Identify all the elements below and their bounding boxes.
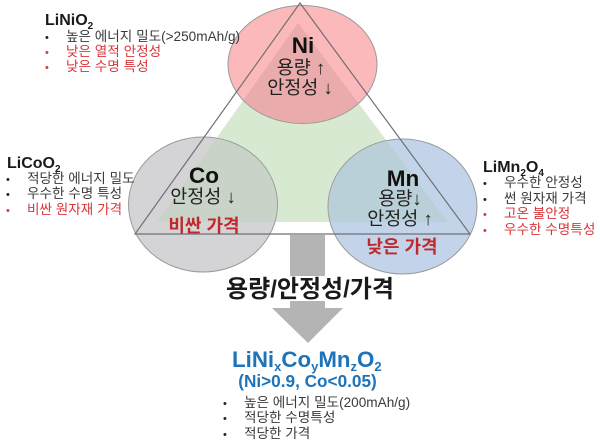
result properties: 적당한 가격 xyxy=(244,426,310,441)
LiNiO2 block: 낮은 수명 특성 xyxy=(66,59,149,74)
LiMn2O4 block: 고온 불안정 xyxy=(504,206,570,221)
result formula: Mn xyxy=(318,347,351,372)
result formula: O xyxy=(357,347,374,372)
LiNiO2 block: • xyxy=(45,32,49,44)
LiNiO2 block: LiNiO xyxy=(45,12,88,29)
Co labels: 비싼 가격 xyxy=(168,216,240,236)
Co labels: Co xyxy=(189,163,219,188)
result formula: z xyxy=(351,359,358,374)
green triangle xyxy=(157,23,448,222)
Ni labels: 안정성 ↓ xyxy=(267,77,333,98)
LiMn2O4 block: O xyxy=(526,159,538,176)
result formula: 2 xyxy=(374,359,382,374)
LiCoO2 block: • xyxy=(6,174,10,186)
result formula: x xyxy=(274,359,282,374)
Ni labels xyxy=(267,33,333,98)
triangle outline xyxy=(135,3,470,234)
result formula: y xyxy=(311,359,319,374)
Ni labels: Ni xyxy=(292,33,314,58)
LiNiO2 block: • xyxy=(45,47,49,59)
result properties: • xyxy=(223,413,227,425)
LiNiO2 block: 낮은 열적 안정성 xyxy=(66,44,161,59)
center label: 용량/안정성/가격 xyxy=(226,276,394,303)
LiCoO2 block: LiCoO xyxy=(7,155,55,172)
LiMn2O4 block: • xyxy=(483,225,487,237)
result properties: 적당한 수명특성 xyxy=(244,410,335,425)
result formula: (Ni>0.9, Co<0.05) xyxy=(238,371,377,391)
LiCoO2 block xyxy=(6,155,135,217)
LiNiO2 block: 2 xyxy=(88,21,94,32)
Mn labels: 낮은 가격 xyxy=(366,237,438,257)
LiCoO2 block: 적당한 에너지 밀도 xyxy=(27,171,135,186)
LiCoO2 block: 우수한 수명 특성 xyxy=(27,186,122,201)
result formula: Co xyxy=(281,347,311,372)
LiCoO2 block: • xyxy=(6,205,10,217)
Ni labels: 용량 ↑ xyxy=(277,57,325,78)
Mn labels: Mn xyxy=(387,166,419,191)
LiCoO2 block: • xyxy=(6,189,10,201)
Mn labels: 안정성 ↑ xyxy=(367,208,433,229)
result formula xyxy=(232,347,382,391)
overlap: Mn and green xyxy=(328,141,448,222)
LiNiO2 block xyxy=(45,12,240,74)
LiMn2O4 block: 우수한 안정성 xyxy=(504,175,583,190)
LiMn2O4 block: • xyxy=(483,209,487,221)
arrow xyxy=(272,235,343,343)
LiNiO2 block: • xyxy=(45,62,49,74)
LiCoO2 block: 비싼 원자재 가격 xyxy=(27,202,122,217)
LiMn2O4 block: 2 xyxy=(520,168,526,179)
overlap: Co and green xyxy=(157,138,277,222)
Mn labels xyxy=(366,166,438,257)
LiNiO2 block: 높은 에너지 밀도(>250mAh/g) xyxy=(66,29,240,44)
LiMn2O4 block xyxy=(483,159,595,237)
Mn labels: 용량↓ xyxy=(378,188,422,209)
LiMn2O4 block: • xyxy=(483,178,487,190)
Co labels: 안정성 ↓ xyxy=(170,186,236,207)
result properties: • xyxy=(223,429,227,441)
LiMn2O4 block: 썬 원자재 가격 xyxy=(504,191,587,206)
result properties: • xyxy=(223,398,227,410)
LiCoO2 block: 2 xyxy=(55,164,61,175)
LiMn2O4 block: 4 xyxy=(538,168,544,179)
result properties: 높은 에너지 밀도(200mAh/g) xyxy=(244,395,410,410)
circle: Mn xyxy=(328,139,477,274)
Co labels xyxy=(168,163,240,236)
LiMn2O4 block: • xyxy=(483,194,487,206)
LiMn2O4 block: LiMn xyxy=(483,159,520,176)
circle: Co xyxy=(128,137,278,272)
circle: Ni xyxy=(228,6,377,124)
result properties xyxy=(223,395,410,441)
result formula: LiNi xyxy=(232,347,274,372)
overlap: Ni and green xyxy=(244,24,358,123)
LiMn2O4 block: 우수한 수명특성 xyxy=(504,222,595,237)
